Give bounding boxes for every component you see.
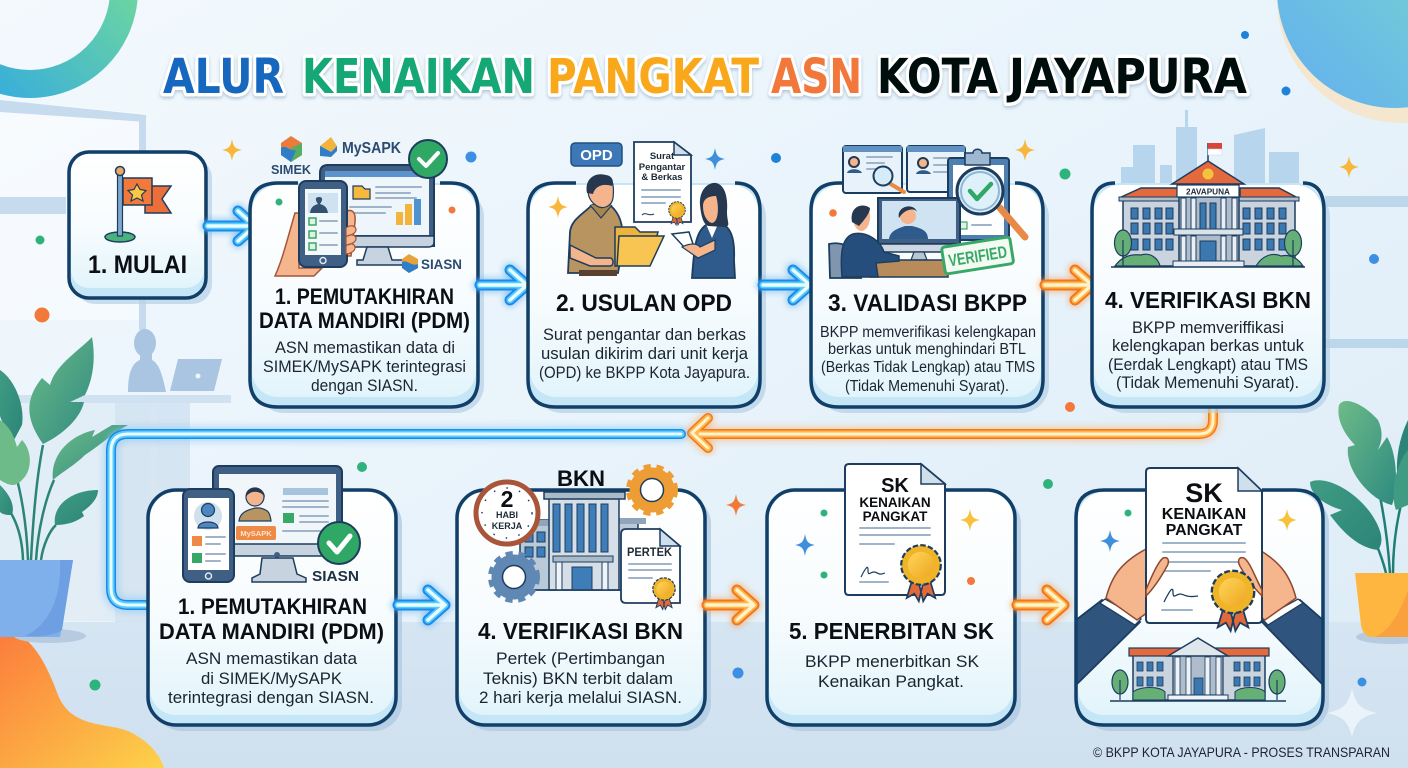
illustration: SK certificate: PANGKAT <box>863 509 928 524</box>
description: (Tidak Memenuhi Syarat). <box>845 378 1009 395</box>
description: BKPP memverifikasi kelengkapan <box>820 324 1036 341</box>
panel: SK handover <box>1076 468 1329 731</box>
description: 2 hari kerja melalui SIASN. <box>479 689 682 707</box>
illustration: hands holding SK certificate: PANGKAT <box>1166 522 1243 539</box>
description <box>805 653 979 691</box>
illustration: government building: 2AVAPUNA <box>1186 188 1230 196</box>
background person at laptop <box>128 329 222 392</box>
panel: 2. Usulan OPD <box>528 142 766 413</box>
heading: 1. PEMUTAKHIRAN <box>275 284 454 309</box>
panel: 4. Verifikasi BKN (BKPP) <box>1092 110 1330 413</box>
title: ASN <box>771 49 862 105</box>
description: di SIMEK/MySAPK <box>201 670 342 688</box>
connector: blue line to second row <box>111 434 681 605</box>
description: berkas untuk menghindari BTL <box>828 341 1026 358</box>
illustration: BKN office, clock, gears and Pertek document <box>476 466 680 609</box>
description: Surat pengantar dan berkas <box>543 326 746 344</box>
illustration: officer hands documents: Surat <box>650 151 675 162</box>
heading: 4. VERIFIKASI BKN <box>1105 287 1311 313</box>
illustration: BKN office, clock, gears and Pertek document: PERTEK <box>627 545 672 559</box>
panel: 1. Mulai <box>69 152 212 304</box>
heading: DATA MANDIRI (PDM) <box>259 308 470 333</box>
description <box>539 326 750 382</box>
arrow <box>1017 590 1064 620</box>
illustration: document validation: VERIFIED <box>947 242 1008 270</box>
illustration: hands holding SK certificate: SK <box>1185 478 1223 508</box>
illustration: devices with SIMEK, MySAPK and SIASN <box>271 136 462 276</box>
description: usulan dikirim dari unit kerja <box>541 345 749 363</box>
description <box>168 650 374 707</box>
illustration: SK certificate <box>845 464 945 601</box>
panel: 3. Validasi BKPP <box>811 146 1049 413</box>
illustration: monitor and phone: MySAPK <box>240 529 272 538</box>
panel: 1. Pemutakhiran Data Mandiri <box>250 136 484 413</box>
decorative blob bottom left <box>0 627 164 768</box>
description: SIMEK/MySAPK terintegrasi <box>263 358 466 376</box>
connector: orange return line from step 4 <box>692 407 1213 448</box>
panel: 4. Verifikasi BKN, second row <box>457 466 711 731</box>
label: 1. MULAI <box>88 251 187 279</box>
panel: 1. Pemutakhiran Data Mandiri, second row <box>148 466 402 731</box>
illustration: monitor and phone: SIASN <box>312 569 359 585</box>
illustration: officer hands documents: OPD <box>580 147 613 164</box>
description: Kenaikan Pangkat. <box>818 673 964 691</box>
arrow <box>208 211 255 241</box>
arrow <box>480 270 527 300</box>
illustration: BKN office, clock, gears and Pertek document: 2 <box>501 486 513 512</box>
description: BKPP menerbitkan SK <box>805 653 979 671</box>
left plant <box>0 337 128 643</box>
heading: 3. VALIDASI BKPP <box>828 290 1027 317</box>
illustration: government building <box>1111 143 1305 267</box>
description <box>820 324 1036 395</box>
description: Pertek (Pertimbangan <box>496 650 665 668</box>
illustration: officer hands documents: Pengantar <box>639 162 686 173</box>
description <box>1108 319 1308 392</box>
description: ASN memastikan data <box>186 650 358 668</box>
title: KENAIKAN <box>302 49 535 105</box>
title <box>163 49 1247 105</box>
right plant <box>1310 401 1408 644</box>
illustration: hands holding SK certificate: KENAIKAN <box>1162 506 1246 523</box>
description: (OPD) ke BKPP Kota Jayapura. <box>539 364 750 382</box>
heading <box>159 594 384 644</box>
illustration: devices with SIMEK, MySAPK and SIASN: SIASN <box>421 257 462 272</box>
heading: 2. USULAN OPD <box>556 290 732 317</box>
title: PANGKAT <box>547 49 759 105</box>
illustration: officer hands documents <box>568 142 735 278</box>
description <box>479 650 682 707</box>
arrow <box>1045 270 1092 300</box>
arrow <box>398 590 445 620</box>
description: terintegrasi dengan SIASN. <box>168 689 374 707</box>
description: (Berkas Tidak Lengkap) atau TMS <box>821 359 1035 376</box>
title: ALUR <box>163 49 284 105</box>
illustration: BKN office, clock, gears and Pertek document: BKN <box>557 466 605 491</box>
panel: 5. Penerbitan SK <box>767 464 1021 731</box>
description: (Tidak Memenuhi Syarat). <box>1116 374 1299 392</box>
title: KOTA <box>877 49 998 105</box>
illustration: officer hands documents: & Berkas <box>641 172 683 183</box>
description: kelengkapan berkas untuk <box>1112 337 1305 355</box>
illustration: building <box>1110 638 1286 701</box>
description <box>263 339 466 395</box>
illustration: monitor and phone <box>183 466 360 585</box>
illustration: document validation <box>829 146 1025 278</box>
heading: 5. PENERBITAN SK <box>789 618 994 644</box>
decorative ring top left <box>0 0 124 84</box>
title: JAYAPURA <box>1006 49 1247 105</box>
description: BKPP memveriffikasi <box>1132 319 1284 337</box>
illustration: hands holding SK certificate <box>1076 468 1323 685</box>
heading: 4. VERIFIKASI BKN <box>478 618 683 644</box>
illustration: BKN office, clock, gears and Pertek document: KERJA <box>492 521 523 531</box>
illustration: devices with SIMEK, MySAPK and SIASN: SIMEK <box>271 163 311 177</box>
description: Teknis) BKN terbit dalam <box>483 670 673 688</box>
description: ASN memastikan data di <box>275 339 455 357</box>
illustration: SK certificate: SK <box>881 475 909 497</box>
heading: DATA MANDIRI (PDM) <box>159 619 384 644</box>
illustration backdrop: city skyline <box>1121 110 1299 207</box>
heading <box>259 284 470 333</box>
illustration: devices with SIMEK, MySAPK and SIASN: MySAPK <box>342 140 401 157</box>
arrow <box>763 270 810 300</box>
icon: flag <box>105 166 171 242</box>
heading: 1. PEMUTAKHIRAN <box>178 594 367 619</box>
description: (Eerdak Lengkapt) atau TMS <box>1108 356 1308 374</box>
illustration: SK certificate: KENAIKAN <box>859 495 931 510</box>
description: dengan SIASN. <box>311 377 418 395</box>
illustration: BKN office, clock, gears and Pertek document: HABI <box>496 510 518 520</box>
arrow <box>707 590 754 620</box>
decorative circle top right <box>1277 0 1408 123</box>
